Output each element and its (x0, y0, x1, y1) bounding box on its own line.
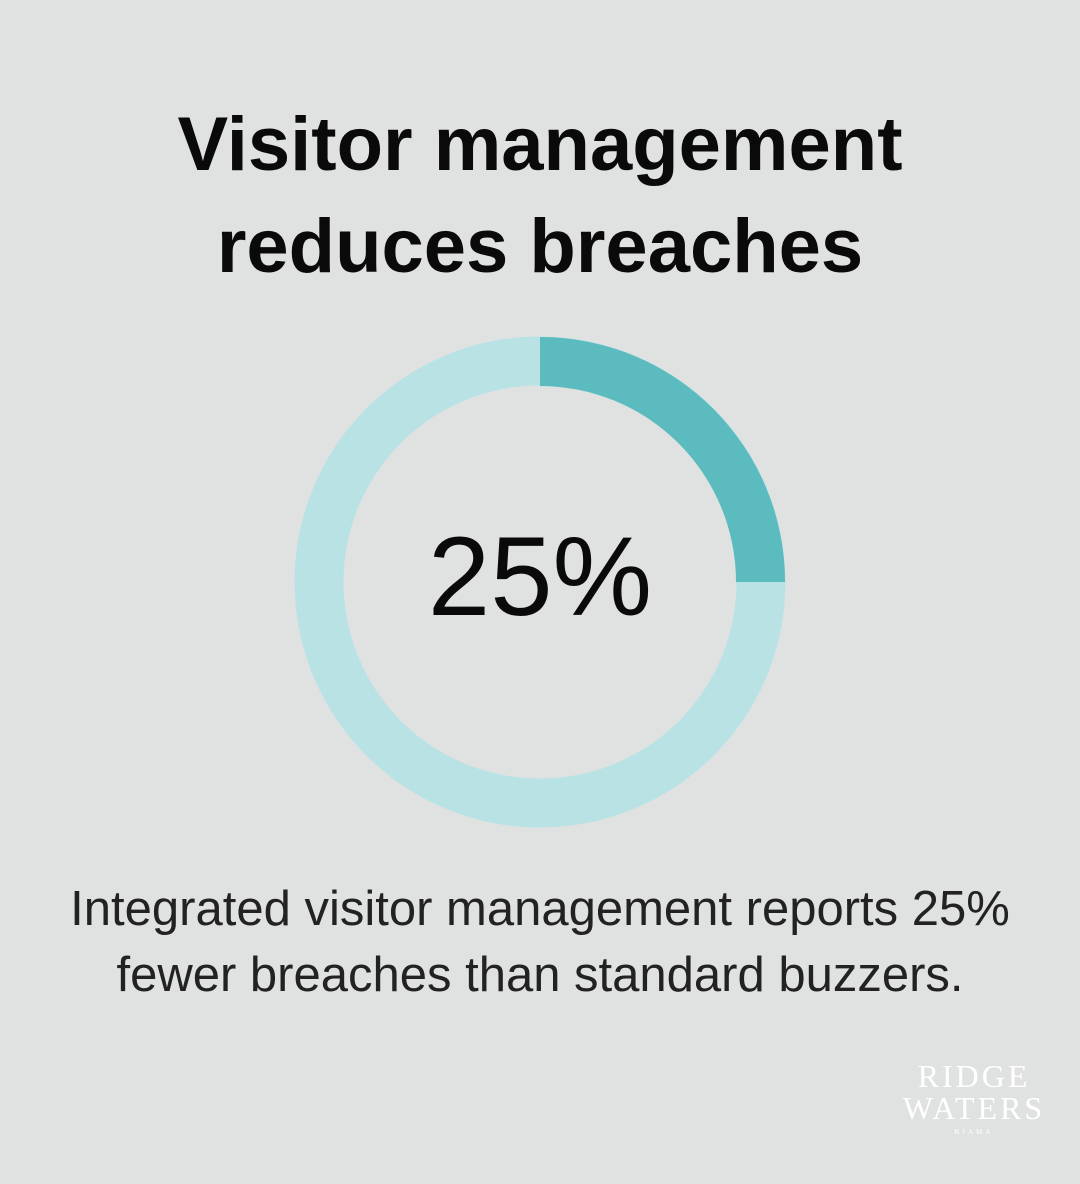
title (177, 102, 903, 289)
donut chart: 25% (428, 514, 652, 639)
body text: fewer breaches than standard buzzers. (116, 948, 964, 1002)
logo (902, 1058, 1045, 1136)
body text: Integrated visitor management reports 25% (70, 882, 1010, 936)
body text (70, 882, 1010, 1002)
title: reduces breaches (217, 204, 863, 289)
logo: WATERS (903, 1090, 1045, 1126)
logo: RIDGE (918, 1058, 1030, 1094)
logo: KIAMA (955, 1128, 993, 1136)
title: Visitor management (177, 102, 903, 187)
